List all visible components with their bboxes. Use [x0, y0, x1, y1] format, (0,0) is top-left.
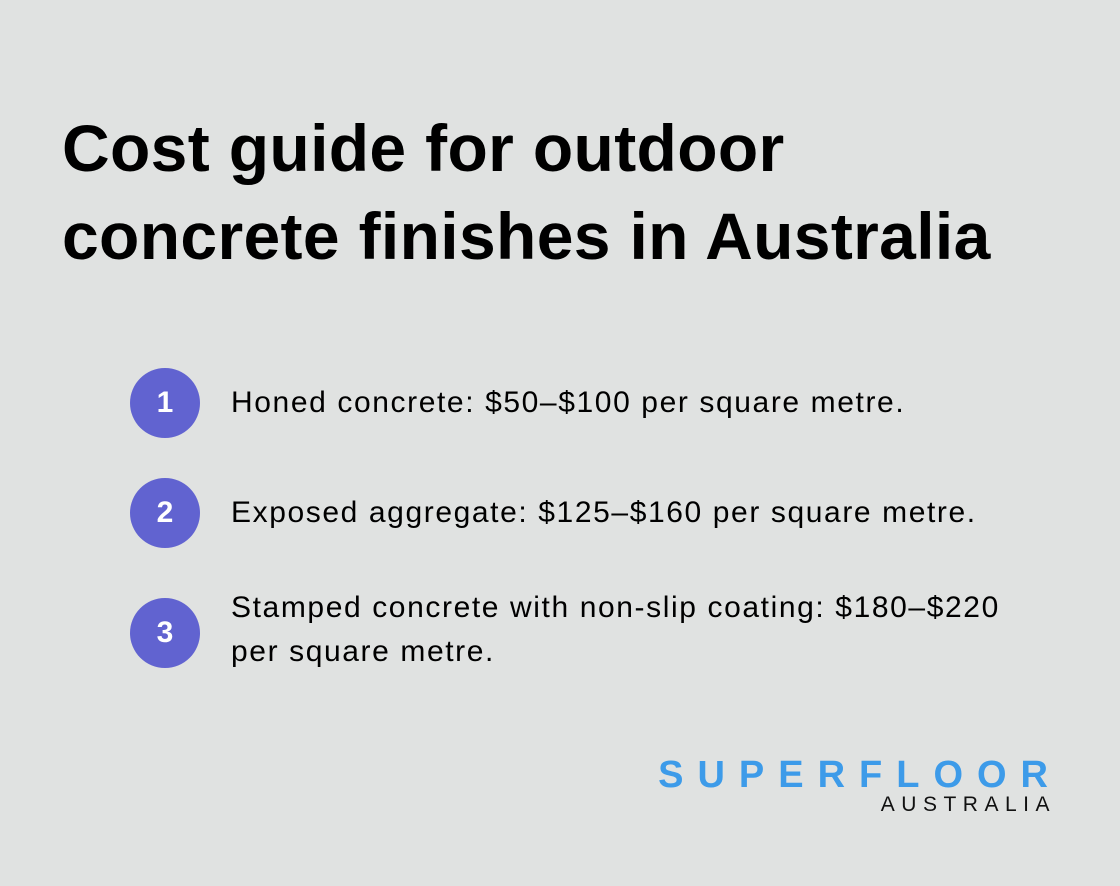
- text 3: Stamped concrete with non-slip coating: $180–$220: [231, 591, 1000, 624]
- text 3: [231, 591, 1000, 668]
- title: Cost guide for outdoor: [62, 111, 785, 185]
- badge 2: [130, 478, 200, 548]
- badge 1: 1: [157, 386, 173, 419]
- title: [62, 111, 991, 273]
- logo: [658, 754, 1062, 816]
- text 1: Honed concrete: $50–$100 per square metre.: [231, 386, 905, 419]
- text 3: per square metre.: [231, 635, 495, 668]
- item 3: [130, 591, 1000, 668]
- badge 1: [130, 368, 200, 438]
- item 1: [130, 368, 905, 438]
- title: concrete finishes in Australia: [62, 199, 991, 273]
- text 2: Exposed aggregate: $125–$160 per square metre.: [231, 496, 977, 529]
- badge 3: [130, 598, 200, 668]
- logo: SUPERFLOOR: [658, 754, 1062, 796]
- item 2: [130, 478, 977, 548]
- logo: AUSTRALIA: [881, 793, 1056, 816]
- badge 3: 3: [157, 616, 173, 649]
- badge 2: 2: [157, 496, 173, 529]
